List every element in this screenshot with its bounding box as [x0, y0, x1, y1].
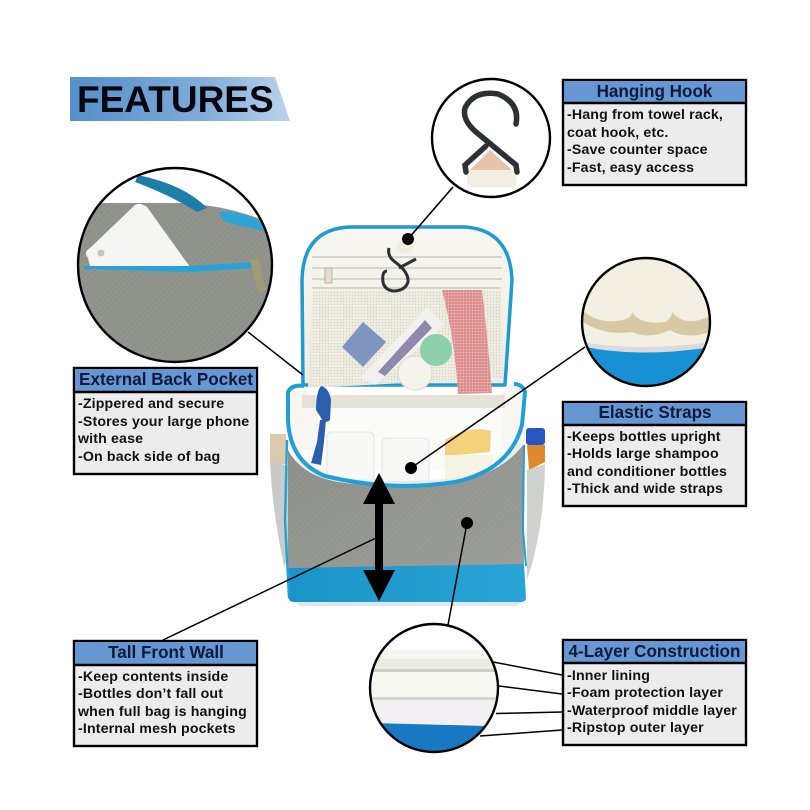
title banner: FEATURES: FEATURES	[77, 79, 274, 120]
text block: coat hook, etc.	[567, 125, 668, 141]
callout: front wall leader line	[163, 538, 376, 640]
blue base	[288, 564, 526, 602]
toothbrush	[311, 386, 331, 465]
toothpaste	[360, 307, 445, 385]
text block: with ease	[77, 431, 143, 447]
text block: -Internal mesh pockets	[78, 721, 236, 737]
text block: and conditioner bottles	[567, 464, 727, 480]
red mesh panel	[442, 290, 492, 394]
interior rim	[296, 440, 520, 490]
text block: -Hang from towel rack,	[567, 107, 723, 123]
callout: straps leader line	[405, 347, 585, 474]
text block: -Bottles don’t fall out	[78, 686, 223, 702]
layer pointer lines	[480, 662, 562, 736]
white bottles	[327, 432, 429, 482]
text block: -On back side of bag	[78, 449, 220, 465]
panel: Tall Front Wall	[74, 641, 257, 746]
circle: layer cross-section detail	[370, 624, 498, 755]
toiletry bag photo	[270, 227, 545, 606]
panel: External Back Pocket	[74, 368, 257, 474]
bag hook small	[383, 241, 416, 291]
text block: -Foam protection layer	[567, 685, 723, 701]
panel: Elastic Straps	[563, 402, 746, 506]
arrow: front wall height	[363, 473, 395, 601]
text block: -Keeps bottles upright	[567, 429, 721, 445]
blue pack	[342, 322, 386, 367]
heading: Elastic Straps	[598, 403, 712, 422]
circle: elastic straps detail	[580, 258, 712, 390]
panel: 4-Layer Construction	[563, 640, 746, 745]
callout: pocket leader line	[248, 332, 303, 375]
text block: -Fast, easy access	[567, 160, 694, 176]
heading: 4-Layer Construction	[569, 642, 740, 661]
text block: -Inner lining	[567, 668, 650, 684]
heading: Tall Front Wall	[108, 643, 224, 662]
circle: hanging hook detail	[432, 79, 550, 197]
contact lens case	[398, 334, 452, 390]
inner zip pocket	[312, 257, 502, 288]
heading: External Back Pocket	[79, 370, 253, 389]
text block: when full bag is hanging	[77, 704, 247, 720]
text block: -Holds large shampoo	[567, 446, 719, 462]
gray front wall	[288, 445, 524, 568]
bag body interior	[288, 384, 526, 450]
text block: -Waterproof middle layer	[567, 703, 737, 719]
text block: -Ripstop outer layer	[567, 720, 704, 736]
callout: layers leader line	[448, 517, 473, 625]
text block: -Keep contents inside	[78, 669, 228, 685]
mesh pocket	[308, 290, 503, 388]
callout: hook leader line	[402, 187, 453, 245]
text block: -Save counter space	[567, 142, 708, 158]
text block: -Zippered and secure	[78, 396, 224, 412]
panel: Hanging Hook	[563, 80, 746, 185]
heading: Hanging Hook	[597, 82, 713, 101]
bag lid with blue zip	[302, 227, 512, 385]
blue zipper trim	[288, 384, 525, 486]
text block: -Stores your large phone	[78, 414, 249, 430]
yellow bottle	[445, 429, 491, 456]
text block: -Thick and wide straps	[567, 481, 723, 497]
side mesh pockets and bottles	[270, 428, 545, 580]
circle: back pocket detail	[70, 168, 280, 370]
